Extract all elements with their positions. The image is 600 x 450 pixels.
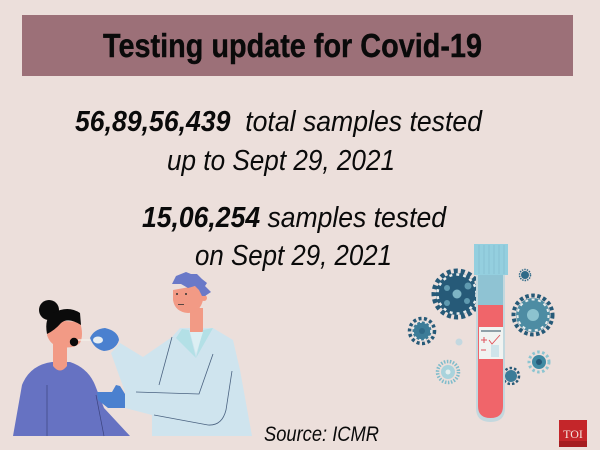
text block: samples tested on the day: on Sept 29, 2021 bbox=[195, 240, 392, 272]
text block: total samples tested bbox=[75, 106, 483, 177]
swab bbox=[78, 339, 98, 341]
virus behind tube bbox=[503, 368, 519, 384]
small top virus bbox=[520, 270, 530, 280]
test tube bbox=[474, 244, 508, 422]
text block: samples tested on the day: 15,06,254 samples tested bbox=[142, 202, 447, 234]
text block: samples tested on the day bbox=[142, 202, 447, 272]
logo: TOI bbox=[559, 420, 587, 447]
lower-right virus bbox=[529, 352, 549, 372]
illustration: doctor swabbing patient bbox=[13, 272, 252, 436]
doctor face details bbox=[176, 293, 187, 305]
text block: total samples tested: up to Sept 29, 2021 bbox=[167, 145, 395, 177]
sweater fold lines bbox=[47, 385, 104, 436]
left virus bbox=[410, 318, 434, 344]
doctor hair bbox=[172, 272, 211, 296]
source credit: Source: ICMR bbox=[264, 423, 379, 446]
right virus bbox=[514, 296, 552, 334]
text block: total samples tested: 56,89,56,439 total samples tested bbox=[75, 106, 483, 138]
big virus bbox=[434, 271, 480, 317]
patient sweater bbox=[13, 362, 130, 436]
lower glove bbox=[97, 385, 125, 408]
tube label bbox=[479, 327, 503, 359]
illustration: test tube and viruses bbox=[410, 244, 552, 422]
title banner: Testing update for Covid-19 bbox=[103, 27, 482, 64]
logo: TOI: TOI bbox=[563, 427, 583, 441]
patient hair and bun bbox=[39, 300, 81, 334]
doctor coat bbox=[111, 328, 252, 436]
pale lower-left virus bbox=[438, 362, 458, 382]
doctor neck and head bbox=[173, 285, 207, 340]
patient neck and face bbox=[47, 321, 82, 370]
patient mouth bbox=[70, 338, 78, 346]
doctor collar bbox=[176, 328, 213, 358]
pale tiny virus bbox=[456, 338, 462, 346]
coat fold lines bbox=[136, 337, 232, 425]
title banner bbox=[22, 15, 573, 76]
upper glove bbox=[90, 328, 119, 351]
